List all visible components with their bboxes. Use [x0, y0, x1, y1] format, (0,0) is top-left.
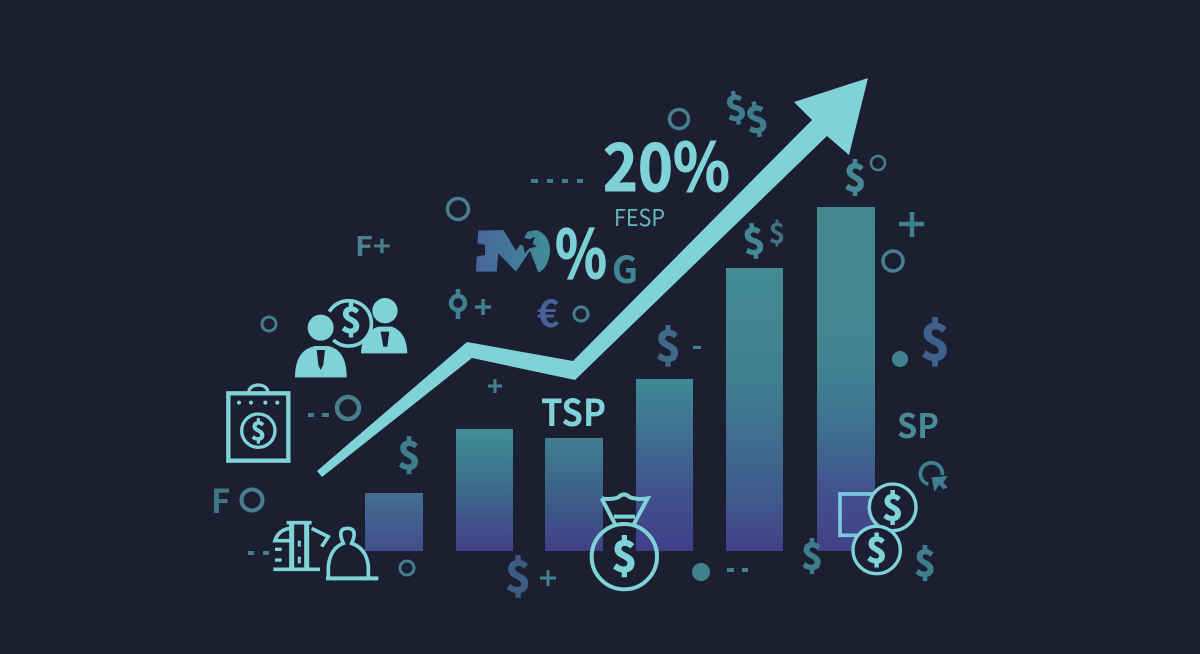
dashes	[248, 179, 748, 572]
percent sign: %	[555, 202, 607, 298]
label: SP: SP	[897, 399, 939, 448]
icon: coins and square	[840, 480, 916, 574]
icon: building and bell	[273, 523, 378, 578]
dollar signs	[398, 80, 950, 605]
label: TSP: TSP	[541, 383, 606, 437]
solid dots	[692, 351, 908, 581]
icon: money bag: $	[612, 524, 637, 585]
dollar signs: $	[505, 543, 531, 605]
dollar signs: $	[721, 80, 750, 132]
garbled numeral shape	[476, 230, 550, 273]
dollar signs: $	[844, 148, 866, 202]
floating rings	[242, 110, 903, 575]
icon: clipboard with coin: $	[251, 412, 266, 448]
coin ring	[329, 301, 371, 346]
letter F: F	[211, 475, 230, 523]
dollar signs: $	[801, 528, 823, 580]
icon: target marker	[451, 289, 465, 319]
icon: coins and square: $	[866, 523, 887, 573]
icon: cursor ring	[920, 463, 948, 492]
label: F+: F+	[355, 225, 391, 264]
dollar signs: $	[656, 313, 680, 374]
dollar signs: $	[769, 212, 785, 252]
icon: clipboard with coin	[228, 385, 288, 461]
bar chart	[365, 207, 875, 551]
letter G: G	[612, 240, 638, 294]
growth arrow	[317, 78, 868, 477]
coin dollar: $	[341, 293, 361, 343]
dollar signs: $	[920, 303, 950, 375]
icon: coins and square: $	[882, 480, 903, 530]
plus signs	[475, 212, 924, 586]
icon: money bag	[592, 494, 657, 589]
dollar signs: $	[914, 535, 936, 587]
icon: business people with coin	[295, 293, 407, 377]
right person	[361, 298, 407, 353]
dollar signs: $	[739, 212, 768, 266]
headline: 20%: 20%	[603, 115, 730, 211]
garbled percent figure	[476, 202, 607, 298]
dollar signs: $	[398, 425, 420, 480]
left person	[295, 314, 347, 377]
euro sign: €	[537, 283, 560, 338]
dollar signs: $	[741, 90, 771, 145]
label: FESP: FESP	[614, 199, 665, 233]
